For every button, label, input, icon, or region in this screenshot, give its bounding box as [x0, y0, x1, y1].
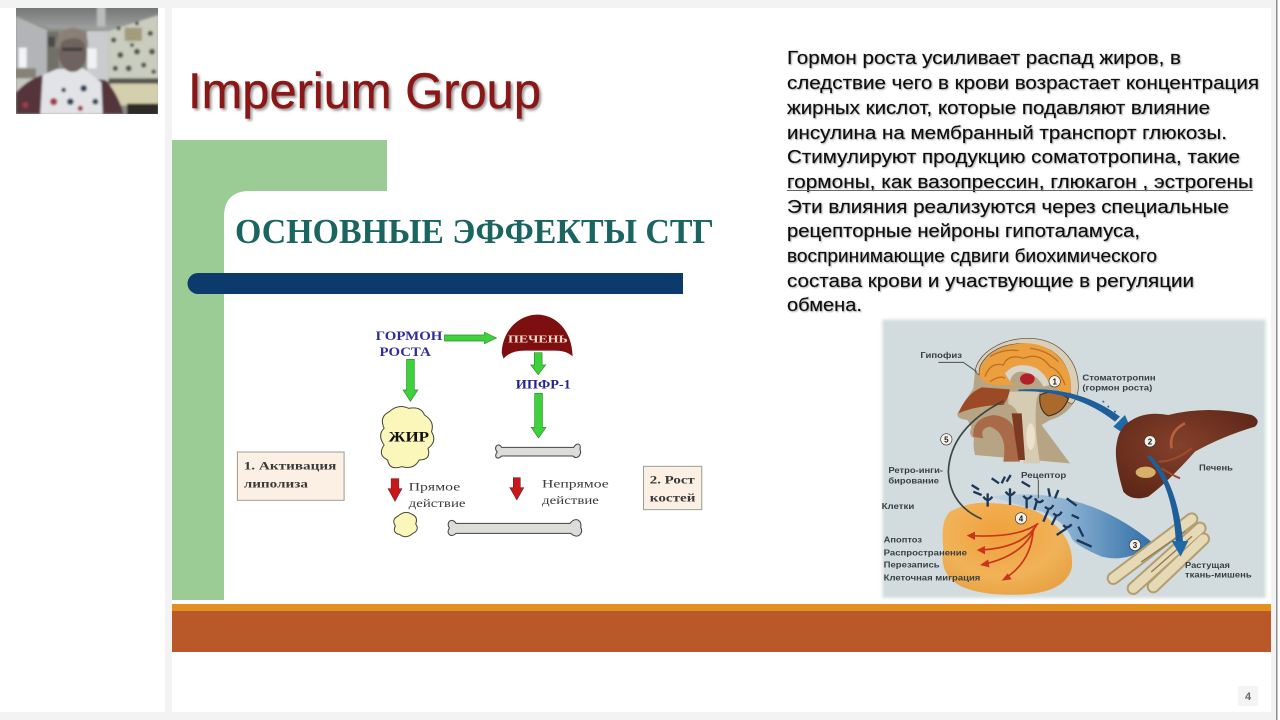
liver dome: ПЕЧЕНЬ: [508, 334, 568, 346]
explanatory paragraph: инсулина на мембранный транспорт глюкозы.: [787, 122, 1227, 143]
explanatory paragraph: состава крови и участвующие в регуляции: [787, 270, 1194, 291]
liver dome: [502, 315, 573, 359]
explanatory paragraph: [787, 47, 1259, 315]
arrow: hormone to fat: [403, 359, 418, 401]
green corner frame: [172, 140, 387, 600]
arrow: IGF-1 to bone: [531, 393, 546, 438]
label: direct action: Прямое: [409, 480, 460, 494]
blue hormone arrow: brain to liver: [1018, 389, 1120, 422]
label: growth hormone: РОСТА: [380, 344, 431, 359]
label: direct action: действие: [409, 496, 466, 510]
numbered markers: 3: [1133, 541, 1138, 550]
fat cell small: [394, 512, 417, 537]
illustration labels: ткань-мишень: [1185, 570, 1252, 579]
explanatory paragraph: Эти влияния реализуются через специальные: [787, 196, 1229, 217]
illustration labels: Растущая: [1185, 561, 1230, 570]
anatomical illustration: growth hormone pathway: [882, 320, 1266, 598]
numbered markers: [941, 376, 1156, 551]
receptors: [972, 475, 1092, 547]
illustration labels: Апоптоз: [884, 536, 922, 545]
label: growth hormone: ГОРМОН: [376, 328, 443, 343]
webcam video thumbnail: [12, 5, 162, 118]
slide number: 4: [1245, 691, 1252, 703]
arrow: liver to IGF-1: [531, 353, 546, 375]
illustration labels: Печень: [1199, 464, 1233, 473]
cell mass: [942, 503, 1072, 595]
blue fan: [990, 494, 1153, 558]
retro-inhibition curve: [948, 401, 1003, 519]
illustration labels: бирование: [888, 476, 940, 485]
numbered markers: 4: [1019, 514, 1024, 523]
illustration labels: Перезапись: [884, 561, 940, 570]
title: Imperium Group: [188, 63, 541, 119]
callout: lipolysis activation: 1. Активация: [244, 459, 337, 472]
label: IGF-1: ИПФР-1: [516, 377, 571, 392]
callout: bone growth: [643, 466, 702, 510]
bottom orange stripe: [172, 604, 1271, 611]
explanatory paragraph: гормоны, как вазопрессин, глюкагон , эстрогены: [787, 171, 1253, 192]
illustration labels: Клетки: [882, 502, 914, 511]
explanatory paragraph: обмена.: [787, 294, 862, 315]
illustration backdrop: [882, 320, 1266, 598]
fat cell large: [381, 406, 434, 468]
explanatory paragraph: рецепторные нейроны гипоталамуса,: [787, 220, 1140, 241]
numbered markers: 5: [944, 435, 949, 444]
illustration labels: Рецептор: [1021, 471, 1066, 480]
bone lower: [448, 520, 582, 536]
illustration labels: Распространение: [884, 548, 968, 557]
numbered markers: 1: [1052, 377, 1057, 386]
navy divider bar: [188, 273, 683, 294]
label: indirect action: Непрямое: [542, 477, 609, 490]
bottom rust band: [172, 611, 1271, 652]
explanatory paragraph: жирных кислот, которые подавляют влияние: [787, 97, 1210, 118]
callout: lipolysis activation: [237, 452, 344, 500]
explanatory paragraph: воспринимающие сдвиги биохимического: [787, 245, 1157, 266]
illustration labels: Клеточная миграция: [884, 573, 981, 582]
red arrow right: [510, 478, 524, 500]
explanatory paragraph: Стимулируют продукцию соматотропина, такие: [787, 146, 1240, 167]
heading: main effects: ОСНОВНЫЕ ЭФФЕКТЫ СТГ: [235, 212, 714, 251]
slide number: [1238, 686, 1258, 706]
right window edge: [1276, 0, 1280, 720]
flow diagram: growth hormone effects: [237, 315, 702, 537]
callout: lipolysis activation: липолиза: [244, 477, 308, 490]
liver: [1116, 410, 1258, 498]
fat cell large: ЖИР: [389, 429, 429, 445]
pituitary: [1020, 373, 1035, 385]
callout: bone growth: костей: [650, 491, 695, 504]
label: indirect action: действие: [542, 493, 599, 507]
red signalling arrows: [970, 523, 1038, 578]
illustration labels: Стоматотропин: [1082, 373, 1156, 382]
callout: bone growth: 2. Рост: [650, 473, 695, 487]
bones: [1113, 519, 1203, 588]
numbered markers: 2: [1148, 437, 1153, 446]
illustration labels: (гормон роста): [1082, 383, 1153, 392]
bone upper: [496, 444, 581, 458]
illustration labels: Гипофиз: [920, 351, 962, 360]
left sidebar panel: [0, 8, 165, 712]
arrow: hormone to liver: [444, 332, 496, 344]
blue arrow: liver to bone: [1147, 455, 1183, 545]
explanatory paragraph: Гормон роста усиливает распад жиров, в: [787, 47, 1181, 68]
illustration labels: [882, 351, 1252, 582]
red arrow left: [388, 479, 402, 501]
explanatory paragraph: следствие чего в крови возрастает концентрация: [787, 72, 1259, 93]
pointer lines: [938, 362, 1038, 498]
illustration labels: Ретро-инги-: [888, 466, 943, 475]
head profile in cross-section: [957, 338, 1078, 463]
